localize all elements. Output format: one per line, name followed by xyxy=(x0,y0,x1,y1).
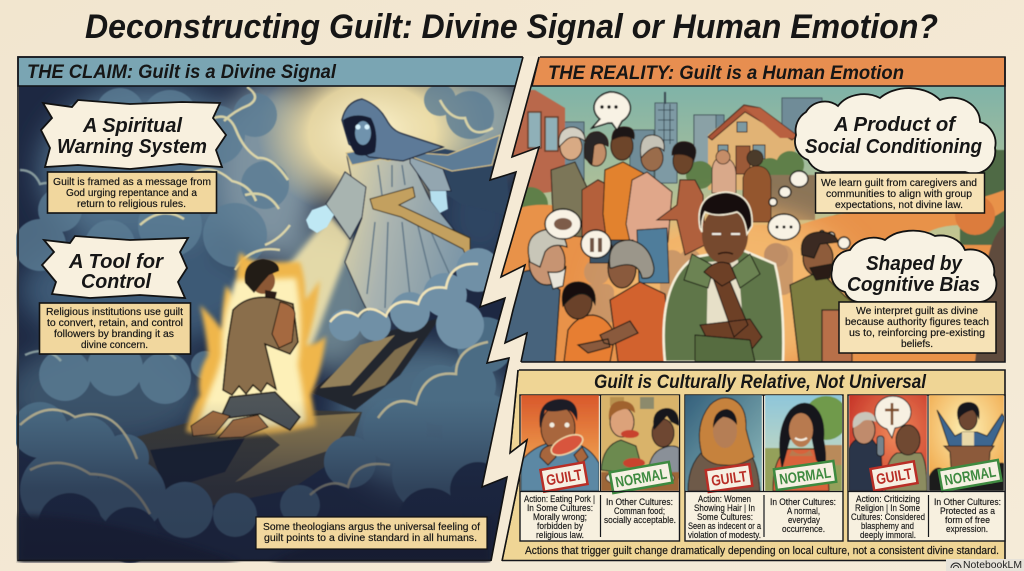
note: theologians: Some theologians argus the universal feeling of xyxy=(263,522,480,533)
example: eating pork xyxy=(520,395,680,541)
note: theologians: guilt points to a divine standard in all humans. xyxy=(264,533,477,544)
caption: criticizing religion guilt: Religion | In Some xyxy=(855,503,920,514)
cape and hood xyxy=(346,135,500,171)
thought cloud: cognitive bias: Cognitive Bias xyxy=(847,273,980,296)
note: control: followers by branding it as xyxy=(54,329,174,340)
note: authority: because authority figures teach xyxy=(845,317,989,328)
stamp: guilt: GUILT xyxy=(710,468,748,490)
stamp: guilt xyxy=(706,464,752,492)
house xyxy=(708,106,795,190)
greenery xyxy=(522,148,998,216)
right edge figure xyxy=(975,225,1005,362)
note: message from god xyxy=(48,172,216,213)
burst: a spiritual warning system: Warning System xyxy=(57,135,207,158)
caption: criticizing religion normal xyxy=(934,497,1001,535)
caption: showing hair guilt: Seen as indecent or a xyxy=(688,521,762,532)
caption: criticizing religion guilt: blasphemy and xyxy=(861,521,914,532)
caption: criticizing religion guilt xyxy=(851,494,925,541)
thought cloud: social conditioning: Social Conditioning xyxy=(805,135,982,158)
cloud banks xyxy=(12,317,518,538)
clouds over robe hem xyxy=(329,248,500,349)
sash xyxy=(369,186,471,254)
scene: normal, showing hair xyxy=(765,395,848,491)
burst: a spiritual warning system: A Spiritual xyxy=(82,114,183,137)
flames xyxy=(186,252,326,436)
caption: showing hair normal: A normal, xyxy=(787,506,820,517)
caption: eating pork guilt xyxy=(524,494,595,541)
note: caregivers: expectations, not divine law. xyxy=(835,200,963,211)
burst: a tool for control: A Tool for xyxy=(68,250,164,273)
scene: guilt, eating pork xyxy=(521,395,599,491)
caption: criticizing religion normal: form of free xyxy=(945,515,990,526)
lightning divider xyxy=(480,56,540,562)
yard couple xyxy=(712,150,771,222)
watermark xyxy=(946,559,1024,571)
title: Deconstructing Guilt: Divine Signal or Human Emotion? xyxy=(85,8,938,46)
panel background xyxy=(502,370,1005,560)
footer statement: Actions that trigger guilt change dramatically depending on local culture, not a consistent divine standard. xyxy=(525,545,999,557)
caption: showing hair normal: occurrence. xyxy=(782,524,825,535)
caption: eating pork guilt: Morally wrong; xyxy=(533,512,587,523)
caption: criticizing religion guilt: Action: Criticizing xyxy=(856,494,920,505)
panel: the reality xyxy=(502,56,1006,363)
brick building xyxy=(513,89,566,194)
storm clouds xyxy=(14,84,494,404)
upper group of people xyxy=(551,127,705,283)
claim illustration xyxy=(5,44,534,563)
kneeling man xyxy=(191,259,300,438)
note: control xyxy=(40,303,190,354)
note: message from god: Guilt is framed as a message from xyxy=(53,177,211,188)
right sleeve and hand xyxy=(410,157,451,191)
panel: culturally relative xyxy=(502,370,1005,560)
note: control: Religious institutions use guilt xyxy=(46,307,183,318)
caption: criticizing religion guilt: deeply immoral. xyxy=(860,530,916,541)
example: women showing hair xyxy=(685,395,848,541)
city skyline xyxy=(562,98,822,185)
caption: showing hair normal: everyday xyxy=(788,515,820,526)
stamp: normal: NORMAL xyxy=(943,464,997,489)
burst: a tool for control: Control xyxy=(81,270,152,293)
example: criticizing religion xyxy=(848,395,1005,541)
note: authority: us to, reinforcing pre-existing xyxy=(849,328,985,339)
left sleeve and hand xyxy=(326,172,366,239)
caption: showing hair normal xyxy=(770,497,836,535)
watermark: NotebookLM xyxy=(963,560,1022,571)
thought cloud: social conditioning: A Product of xyxy=(833,113,957,136)
hooded divine figure xyxy=(306,99,511,349)
stamp: normal: NORMAL xyxy=(778,464,832,489)
scene: normal, common food xyxy=(601,395,679,491)
caption: showing hair guilt xyxy=(688,494,762,541)
caption: showing hair guilt: violation of modesty. xyxy=(688,530,761,541)
panel: the claim xyxy=(5,44,534,563)
scene: guilt, criticizing religion xyxy=(849,395,927,491)
note: authority: We interpret guilt as divine xyxy=(856,306,978,317)
rock ledge xyxy=(133,408,362,510)
reality illustration xyxy=(502,86,1004,362)
caption: eating pork normal xyxy=(604,497,676,526)
caption: eating pork guilt: Action: Eating Pork | xyxy=(524,494,595,505)
caption: eating pork guilt: forbidden by xyxy=(537,521,583,532)
note: authority: beliefs. xyxy=(901,339,933,350)
burst: a tool for control xyxy=(42,236,188,298)
speech bubbles xyxy=(545,92,850,258)
note: control: to convert, retain, and control xyxy=(47,318,183,329)
stamp: guilt: GUILT xyxy=(875,465,913,488)
caption: criticizing religion normal: expression. xyxy=(946,524,988,535)
scene: normal, free expression xyxy=(929,395,1005,491)
note: caregivers: We learn guilt from caregivers and xyxy=(821,178,977,189)
caption: showing hair guilt: Some Cultures: xyxy=(697,512,753,523)
orange ground xyxy=(502,190,1004,362)
burst: a spiritual warning system xyxy=(41,100,226,169)
claim header bar xyxy=(18,57,533,86)
central thoughtful man xyxy=(664,192,783,362)
scene: guilt, showing hair xyxy=(685,395,762,491)
note: caregivers: communities to align with group xyxy=(826,189,972,200)
stamp: normal: NORMAL xyxy=(614,466,668,491)
lower left people xyxy=(506,228,667,362)
caption: criticizing religion normal: Protected as a xyxy=(940,506,996,517)
caption: showing hair guilt: Showing Hair | In xyxy=(694,503,755,514)
panel heading: Guilt is Culturally Relative, Not Universal xyxy=(594,372,927,393)
caption: eating pork guilt: religious law. xyxy=(536,530,584,541)
claim header bar: THE CLAIM: Guilt is a Divine Signal xyxy=(27,62,337,83)
reality header bar xyxy=(532,57,1005,86)
note: caregivers xyxy=(816,173,984,213)
bearded man xyxy=(788,230,854,362)
note: authority xyxy=(839,302,996,353)
thought cloud: cognitive bias xyxy=(831,231,996,302)
robe xyxy=(345,156,470,320)
note: control: divine concern. xyxy=(81,340,148,351)
caption: eating pork normal: In Other Cultures: xyxy=(606,497,673,508)
background crowd xyxy=(582,243,793,324)
thought cloud: cognitive bias: Shaped by xyxy=(866,252,963,275)
caption: showing hair guilt: Action: Women xyxy=(698,494,751,505)
caption: criticizing religion guilt: Cultures: Considered xyxy=(851,512,925,523)
note: message from god: God urging repentance and a xyxy=(66,188,197,199)
caption: eating pork normal: Comman food; xyxy=(614,506,665,517)
caption: eating pork normal: socially acceptable. xyxy=(604,515,676,526)
note: theologians xyxy=(256,517,487,549)
note: message from god: return to religious rules. xyxy=(77,199,186,210)
caption: showing hair normal: In Other Cultures: xyxy=(770,497,836,508)
caption: eating pork guilt: In Some Cultures: xyxy=(527,503,593,514)
dark under-cape xyxy=(427,148,508,196)
reality header text: THE REALITY: Guilt is a Human Emotion xyxy=(548,63,904,84)
stamp: guilt: GUILT xyxy=(545,466,583,489)
caption: criticizing religion normal: In Other Cultures: xyxy=(934,497,1001,508)
thought cloud: social conditioning xyxy=(795,88,996,174)
